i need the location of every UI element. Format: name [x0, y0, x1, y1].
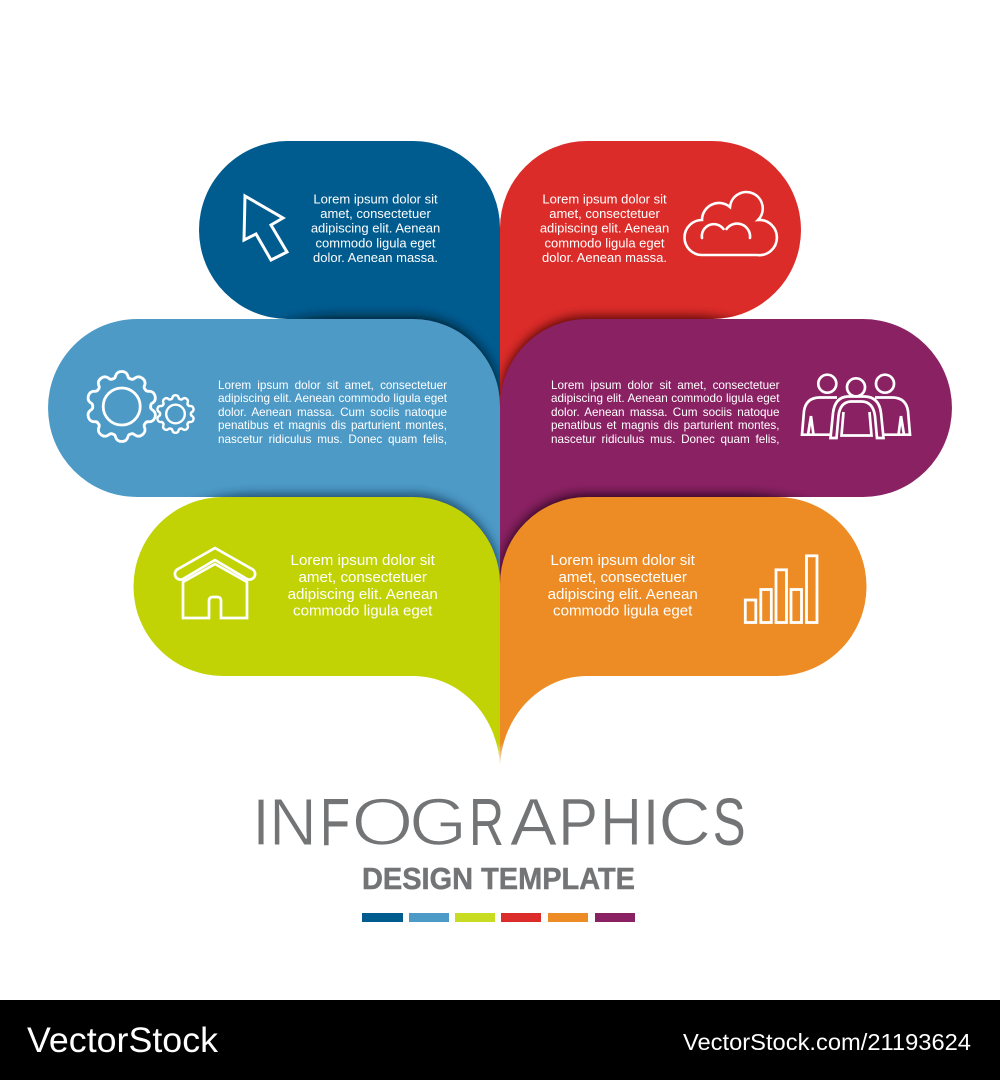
title: F: [320, 785, 350, 860]
text: light blue panel: [218, 379, 447, 449]
title: P: [558, 785, 598, 860]
panel: red: [500, 141, 801, 406]
text: purple panel: adipiscing elit. Aenean commodo ligula eget: [551, 392, 780, 405]
title: A: [510, 785, 557, 860]
text: dark blue panel: amet, consectetuer: [320, 206, 431, 221]
text: orange panel: commodo ligula eget: [553, 603, 693, 620]
text: green panel: Lorem ipsum dolor sit: [291, 552, 436, 569]
text: light blue panel: Lorem ipsum dolor sit amet, consectetuer: [218, 379, 447, 392]
title: C: [658, 785, 711, 860]
icon: people: [802, 375, 910, 438]
title: I: [252, 785, 270, 860]
text: purple panel: Lorem ipsum dolor sit amet, consectetuer: [551, 379, 780, 392]
text: dark blue panel: adipiscing elit. Aenean: [311, 221, 440, 236]
icon: cloud: [684, 192, 777, 255]
text: red panel: commodo ligula eget: [545, 235, 665, 250]
title: S: [713, 785, 746, 860]
colour key bars: [362, 913, 635, 922]
text: purple panel: dolor. Aenean massa. Cum sociis natoque: [551, 406, 780, 419]
icon: gears: [86, 372, 195, 442]
panel: orange: [500, 497, 866, 770]
text: dark blue panel: dolor. Aenean massa.: [313, 250, 438, 265]
text: dark blue panel: commodo ligula eget: [316, 235, 436, 250]
title: H: [600, 785, 642, 860]
title: I: [642, 785, 660, 860]
footer brand: VectorStock: [27, 1021, 219, 1060]
text: light blue panel: nascetur ridiculus mus. Donec quam felis,: [218, 433, 447, 446]
title: G: [409, 785, 467, 860]
text: light blue panel: dolor. Aenean massa. Cum sociis natoque: [218, 406, 447, 419]
title: O: [351, 785, 414, 860]
text: green panel: adipiscing elit. Aenean: [288, 586, 438, 603]
footer bar: [0, 1000, 1000, 1080]
footer image id: VectorStock.com/21193624: [683, 1029, 971, 1055]
text: green panel: amet, consectetuer: [299, 569, 427, 586]
panel: green: [134, 497, 500, 770]
text: dark blue panel: Lorem ipsum dolor sit: [313, 192, 438, 206]
panel: light blue: [48, 319, 500, 584]
text: purple panel: penatibus et magnis dis parturient montes,: [551, 419, 780, 432]
panel: purple: [500, 319, 952, 584]
text: red panel: dolor. Aenean massa.: [542, 250, 667, 265]
title: N: [269, 785, 317, 860]
icon: bar chart: [745, 556, 817, 622]
text: purple panel: nascetur ridiculus mus. Donec quam felis,: [551, 433, 780, 446]
text: orange panel: Lorem ipsum dolor sit: [551, 552, 696, 569]
panel: dark blue: [199, 141, 500, 406]
text: light blue panel: adipiscing elit. Aenean commodo ligula eget: [218, 392, 447, 405]
text: red panel: Lorem ipsum dolor sit: [542, 192, 667, 206]
icon: house: [175, 548, 255, 618]
text: purple panel: [551, 379, 780, 449]
text: green panel: commodo ligula eget: [293, 603, 433, 620]
text: red panel: amet, consectetuer: [549, 206, 660, 221]
title: R: [469, 785, 504, 860]
text: red panel: adipiscing elit. Aenean: [540, 221, 669, 236]
text: orange panel: amet, consectetuer: [559, 569, 687, 586]
text: orange panel: adipiscing elit. Aenean: [548, 586, 698, 603]
icon: cursor arrow: [244, 196, 287, 260]
text: light blue panel: penatibus et magnis dis parturient montes,: [218, 419, 447, 432]
subtitle: DESIGN TEMPLATE: [362, 861, 635, 896]
